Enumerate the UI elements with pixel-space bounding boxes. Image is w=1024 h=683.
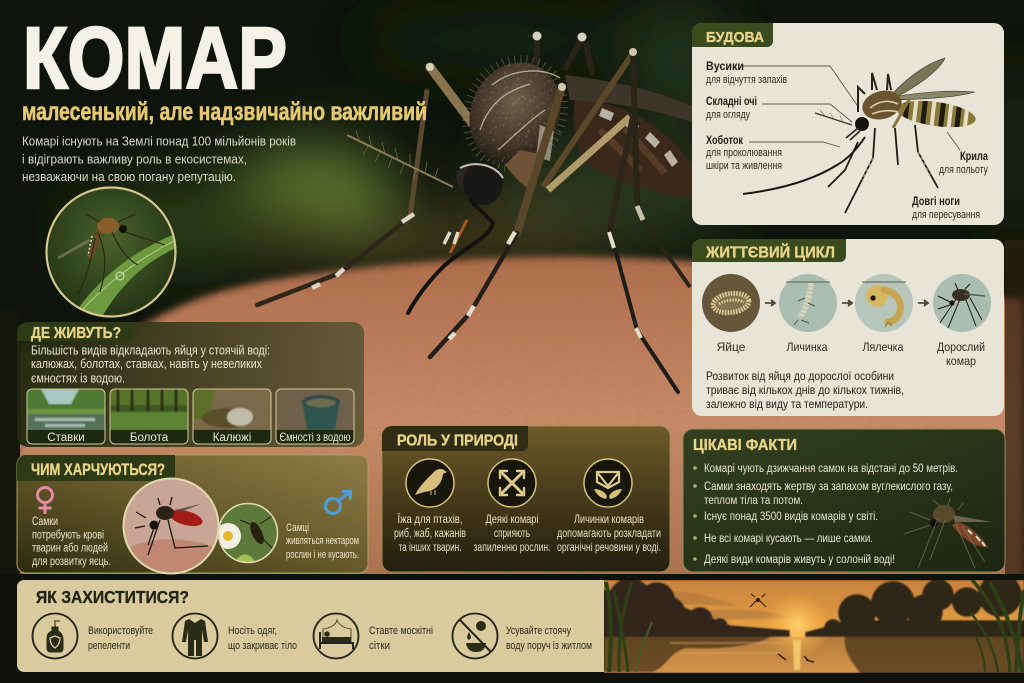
life cycle text: [706, 369, 904, 411]
proboscis: [450, 220, 467, 253]
panel: anatomy: [692, 23, 1004, 225]
facts list: Існує понад 3500 видів комарів у світі.: [704, 511, 878, 523]
left front leg: [430, 67, 472, 123]
protection texts: [88, 625, 592, 652]
title: КОМАР: [23, 10, 287, 107]
male text: рослин і не кусають.: [286, 549, 359, 561]
male text: [286, 522, 359, 561]
mosquito illustration: [904, 498, 992, 568]
heading tab: what they eat: [17, 455, 175, 481]
protection texts: Усувайте стоячу: [506, 625, 571, 637]
anatomy labels: Хоботок: [706, 133, 744, 147]
role texts: Їжа для птахів,: [398, 514, 462, 526]
photo: ponds: [27, 389, 105, 444]
arrow: larva to pupa: [842, 300, 852, 306]
facts list: Не всі комарі кусають — лише самки.: [704, 533, 873, 545]
bullets: [693, 466, 697, 561]
heading tab: where they live: ДЕ ЖИВУТЬ?: [31, 325, 121, 342]
photo circle: male on flower: [215, 504, 278, 562]
anatomy labels: для огляду: [706, 109, 750, 121]
intro text: [22, 134, 296, 184]
icon: male symbol: [326, 492, 350, 514]
hero mosquito: [257, 32, 692, 392]
protection texts: Ставте москітні: [369, 625, 433, 637]
role texts: Личинки комарів: [574, 514, 644, 526]
description: ємностях із водою.: [31, 372, 125, 386]
icon: protective clothing: [172, 614, 218, 658]
panel: role in nature: [382, 426, 670, 572]
panel: how to protect: [17, 580, 604, 672]
heading tab: anatomy: [692, 23, 773, 47]
facts list: Комарі чують дзижчання самок на відстані до 50 метрів.: [704, 463, 958, 475]
icon: shield with leaves: [584, 459, 632, 507]
intro text: незважаючи на свою погану репутацію.: [22, 169, 236, 184]
anatomy mosquito illustration: [743, 58, 977, 213]
heading: fun facts: ЦІКАВІ ФАКТИ: [693, 437, 797, 454]
panel: what they eat: [17, 455, 368, 580]
heading tab: role in nature: [382, 426, 528, 451]
photo: puddles: [193, 389, 271, 444]
protection texts: Носіть одяг,: [228, 625, 277, 637]
photo: puddles: Калюжі: [213, 432, 251, 444]
facts list: Деякі види комарів живуть у солоній воді!: [704, 554, 895, 566]
role texts: [394, 514, 661, 554]
panel: where they live: [17, 322, 364, 447]
heading tab: life cycle: ЖИТТЄВИЙ ЦИКЛ: [705, 244, 835, 262]
photo circle: mosquito on leaf: [46, 188, 180, 320]
female text: тварин або людей: [32, 542, 108, 554]
heading tab: life cycle: [692, 239, 846, 262]
facts list: [704, 463, 958, 566]
panel: fun facts: [683, 429, 1005, 572]
panel: life cycle: [692, 239, 1004, 416]
right leg rear: [633, 53, 637, 200]
icon: female symbol: [38, 488, 52, 514]
heading tab: role in nature: РОЛЬ У ПРИРОДІ: [397, 432, 518, 450]
icon: no standing water: [452, 614, 498, 658]
antenna: [347, 131, 453, 187]
stage labels: Яйце: [717, 340, 746, 354]
abdomen: [573, 100, 692, 198]
stage labels: Лялечка: [862, 340, 904, 354]
stage: pupa: [855, 274, 913, 332]
tree line right: [805, 573, 1024, 637]
head and eye: [456, 166, 480, 190]
role texts: допомагають розкладати: [557, 528, 661, 540]
wing: [565, 75, 692, 122]
life cycle text: триває від кількох днів до кількох тижнів,: [706, 383, 904, 397]
photo: containers: [276, 389, 354, 444]
tree line left: [604, 578, 790, 637]
female text: Самки: [32, 516, 58, 528]
role texts: Деякі комарі: [486, 514, 538, 526]
description: [31, 344, 270, 386]
arrow: egg to larva: [765, 300, 775, 306]
protection texts: репеленти: [88, 640, 130, 652]
icon: bird: [406, 459, 454, 507]
role texts: сприяють: [494, 528, 530, 540]
photo: swamps: Болота: [130, 432, 169, 444]
stage labels: Личинка: [786, 340, 828, 354]
anatomy labels: Крила: [960, 149, 988, 163]
flying mosquitoes: [750, 594, 766, 607]
intro text: і відіграють важливу роль в екосистемах,: [22, 152, 247, 166]
photo circle: biting female: [122, 478, 220, 574]
right leg front: [610, 117, 633, 230]
female text: потребують крові: [32, 530, 104, 542]
reeds: [606, 580, 1024, 672]
description: калюжах, болотах, ставках, навіть у невеликих: [31, 357, 263, 371]
photo: sunset over pond: [604, 573, 1024, 673]
anatomy labels: для відчуття запахів: [706, 74, 787, 86]
water reflections: [604, 637, 1024, 673]
photo: containers: Ємності з водою: [280, 432, 351, 444]
protection texts: воду поруч із житлом: [506, 640, 592, 652]
male text: живляться нектаром: [286, 535, 359, 547]
anatomy labels: Довгі ноги: [912, 194, 960, 208]
male text: Самці: [286, 522, 309, 534]
life cycle text: Розвиток від яйця до дорослої особини: [706, 369, 894, 383]
facts list: теплом тіла та потом.: [704, 495, 803, 507]
stage: larva: [779, 274, 837, 332]
subtitle: малесенький, але надзвичайно важливий: [22, 98, 427, 126]
back legs: [537, 37, 592, 72]
femurs to right knee: [543, 53, 633, 187]
anatomy labels: Вусики: [706, 59, 744, 73]
anatomy labels: для проколювання: [706, 147, 782, 159]
heading: how to protect: ЯК ЗАХИСТИТИСЯ?: [36, 587, 189, 607]
female text: [32, 516, 111, 568]
thorax: [449, 43, 581, 183]
facts list: Самки знаходять жертву за запахом вуглекислого газу,: [704, 481, 953, 493]
role texts: та інших тварин.: [398, 542, 462, 554]
role texts: риб, жаб, кажанів: [394, 528, 466, 540]
anatomy labels: для пересування: [912, 209, 980, 221]
anatomy labels: [706, 59, 988, 221]
skin surface: [17, 257, 1024, 590]
protection texts: сітки: [369, 640, 390, 652]
icon: repellent bottle: [32, 614, 78, 658]
role texts: органічні речовини у воді.: [557, 542, 661, 554]
female text: для розвитку яєць.: [32, 556, 111, 568]
stage labels: [717, 340, 985, 368]
life cycle text: залежно від виду та температури.: [706, 397, 868, 411]
role texts: запиленню рослин.: [474, 542, 550, 554]
stage: adult: [933, 274, 991, 332]
icon: crossed arrows: [488, 459, 536, 507]
anatomy labels: шкіри та живлення: [706, 160, 782, 172]
photo: swamps: [110, 389, 188, 444]
intro text: Комарі існують на Землі понад 100 мільйонів років: [22, 134, 296, 148]
stage labels: Дорослий: [937, 340, 985, 354]
anatomy labels: для польоту: [939, 164, 988, 176]
anatomy labels: Складні очі: [706, 94, 757, 108]
photo: ponds: Ставки: [47, 432, 85, 444]
arrow: pupa to adult: [918, 300, 928, 306]
heading tab: anatomy: БУДОВА: [706, 29, 764, 46]
front middle leg: [517, 87, 562, 233]
leader lines: [743, 66, 960, 150]
protection texts: Використовуйте: [88, 625, 153, 637]
stage: egg: [702, 274, 760, 332]
description: Більшість видів відкладають яйця у стоячій воді:: [31, 344, 270, 358]
heading tab: what they eat: ЧИМ ХАРЧУЮТЬСЯ?: [31, 460, 165, 479]
stage labels: комар: [946, 354, 976, 368]
icon: bed with net: [314, 614, 358, 658]
protection texts: що закриває тіло: [228, 640, 297, 652]
